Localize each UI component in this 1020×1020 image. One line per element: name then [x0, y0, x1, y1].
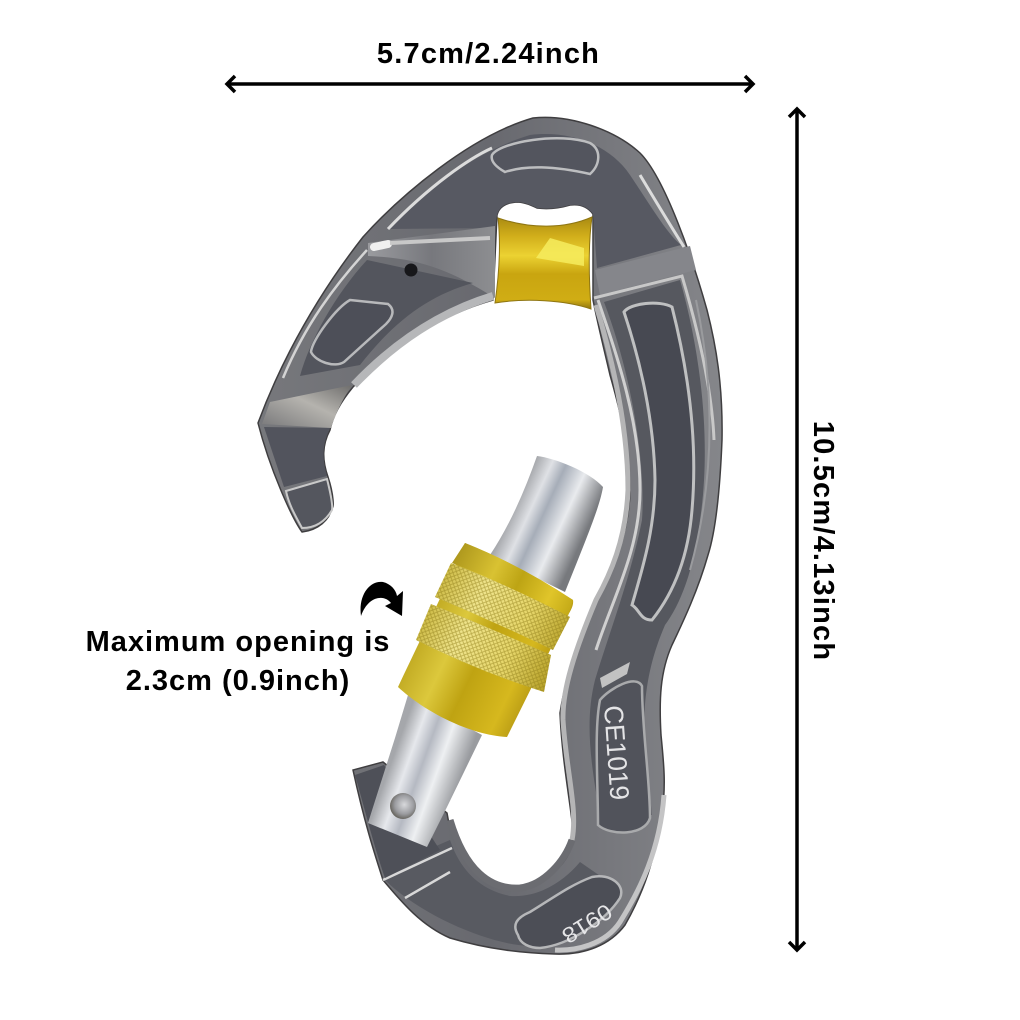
maximum opening note: 2.3cm (0.9inch): [126, 665, 350, 697]
hook inner light edge: [354, 296, 493, 385]
hook window recess: [311, 300, 392, 364]
inner spine light edge: [563, 305, 628, 840]
width dimension arrow: [227, 76, 753, 92]
knurled lower band: [416, 604, 551, 692]
width dimension label: 5.7cm/2.24inch: [377, 38, 600, 70]
inner base dark edge: [450, 820, 572, 888]
roller shine: [536, 238, 584, 266]
top window recess: [492, 138, 598, 174]
carabiner body: hook, spine and nose: [258, 117, 722, 954]
spine window recess: [624, 303, 694, 620]
nose plate: [355, 765, 440, 878]
hook upper band: [368, 226, 495, 298]
knurled upper band: [435, 563, 570, 650]
gate rivet: [390, 793, 416, 819]
CE1019 recess: [597, 681, 650, 833]
spine diagonal facet: [600, 662, 630, 688]
hook tip plate: [264, 427, 330, 487]
carabiner: [258, 117, 722, 954]
yellow roller: [495, 217, 592, 309]
stamp: 0918: 0918: [558, 899, 617, 949]
gate pin upper: [490, 456, 603, 592]
spine upper light facet: [595, 246, 696, 295]
spine inner highlight: [596, 300, 640, 650]
stamp: CE1019: CE1019: [598, 704, 635, 801]
base dark plate: [385, 840, 606, 946]
sleeve top ring: [452, 543, 573, 616]
nose facet lines: [383, 848, 452, 898]
hook dark plate: [300, 260, 473, 376]
hook outer highlight: [283, 250, 367, 378]
top highlight: [388, 148, 684, 247]
outer lower edge highlight: [555, 795, 664, 950]
gold locking sleeve: [398, 543, 573, 737]
maximum opening note: [86, 626, 390, 697]
stamp recess: [515, 876, 621, 948]
rivet hole: [404, 264, 418, 276]
spine dark plate: [590, 280, 705, 815]
hook tip facet: [262, 385, 352, 428]
height dimension label: 10.5cm/4.13inch: [807, 421, 839, 661]
curved rotation arrow: [361, 582, 403, 616]
top dark plate: [388, 134, 681, 268]
maximum opening note: Maximum opening is: [86, 626, 390, 658]
hook tip recess: [286, 479, 332, 528]
height dimension arrow: [789, 109, 805, 950]
gate pin lower: [368, 695, 482, 847]
